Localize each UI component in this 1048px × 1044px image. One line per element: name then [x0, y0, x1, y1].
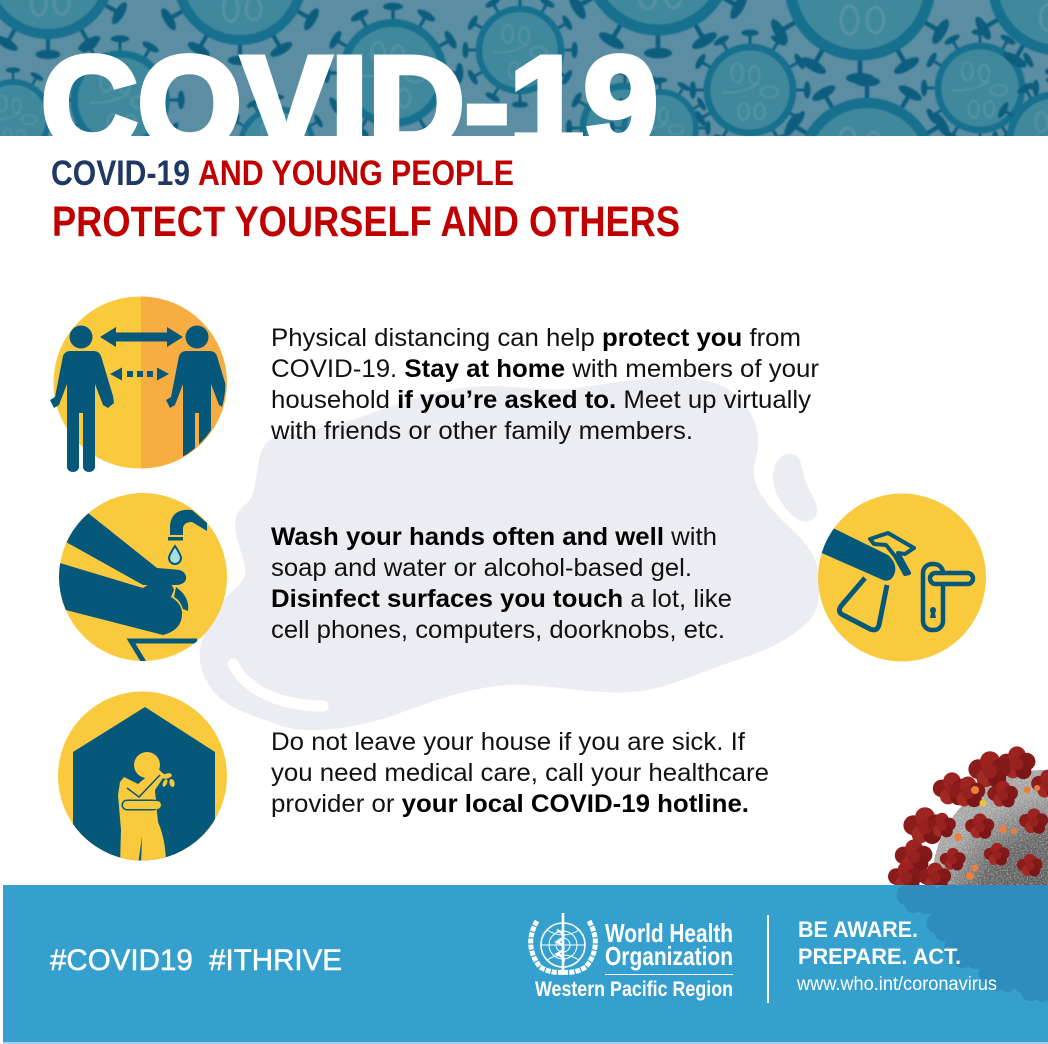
WHO name: World Health [605, 918, 733, 948]
text block: physical distancing [270, 324, 819, 445]
WHO emblem [531, 913, 595, 975]
virus photo [888, 746, 1048, 885]
hashtags: #COVID19 #ITHRIVE [50, 944, 342, 977]
subtitle line one: AND YOUNG PEOPLE [198, 154, 514, 193]
text block: hand washing: soap and water or alcohol-based gel. [271, 554, 692, 582]
divider [767, 915, 769, 1003]
text block: hand washing [271, 523, 732, 644]
title: COVID-19 [41, 30, 658, 178]
slogan: PREPARE. ACT. [798, 944, 961, 969]
bottle [839, 578, 887, 630]
text block: sick at home: provider or your local COVID-19 hotline. [271, 790, 749, 818]
door handle [923, 564, 943, 630]
droplet [773, 454, 817, 522]
slogan [796, 917, 997, 995]
sneeze droplets [162, 773, 172, 779]
person left [50, 326, 114, 472]
icon: physical distancing [50, 296, 230, 472]
icon: hand washing [50, 493, 227, 664]
house [73, 707, 215, 870]
text block: hand washing: Wash your hands often and well with [271, 523, 717, 551]
spray head [870, 533, 914, 574]
spray arm [815, 528, 895, 581]
sink [131, 641, 197, 664]
upper arm [66, 513, 186, 585]
slogan: BE AWARE. [798, 917, 918, 942]
banner virus pattern [0, 0, 1048, 136]
person right [166, 326, 226, 456]
background blob [200, 377, 819, 730]
faucet [170, 510, 207, 535]
text block: physical distancing: household if you’re asked to. Meet up virtually [271, 386, 812, 414]
arrow dashed [110, 368, 169, 380]
lower arm [59, 563, 182, 635]
subtitle line two: PROTECT YOURSELF AND OTHERS [52, 198, 680, 246]
text block: physical distancing: COVID-19. Stay at home with members of your [271, 355, 819, 383]
blob highlight [233, 664, 323, 706]
WHO logo [531, 913, 733, 1001]
banner [0, 0, 1048, 136]
virus shadow in footer [896, 885, 1048, 1002]
slogan: www.who.int/coronavirus [796, 974, 997, 995]
water drop [169, 546, 181, 564]
WHO name [535, 918, 733, 1001]
text block: physical distancing: Physical distancing can help protect you from [271, 324, 801, 352]
text block: hand washing: cell phones, computers, doorknobs, etc. [271, 616, 725, 644]
arrow solid [100, 327, 183, 347]
WHO name: Western Pacific Region [535, 978, 733, 1001]
icon: stay home when sick [58, 692, 227, 870]
WHO name: Organization [605, 941, 733, 971]
icon: disinfect surfaces [815, 494, 986, 662]
text block: sick at home: you need medical care, call your healthcare [271, 759, 769, 787]
subtitle line one [51, 154, 514, 193]
text block: sick at home: Do not leave your house if you are sick. If [271, 728, 745, 756]
subtitle line one: COVID-19 [51, 154, 190, 193]
footer band [3, 885, 1048, 1042]
text block: physical distancing: with friends or other family members. [270, 417, 693, 445]
text block: hand washing: Disinfect surfaces you touch a lot, like [271, 585, 732, 613]
text block: sick at home [271, 728, 769, 818]
coughing person [118, 752, 175, 865]
keyhole [930, 607, 936, 618]
